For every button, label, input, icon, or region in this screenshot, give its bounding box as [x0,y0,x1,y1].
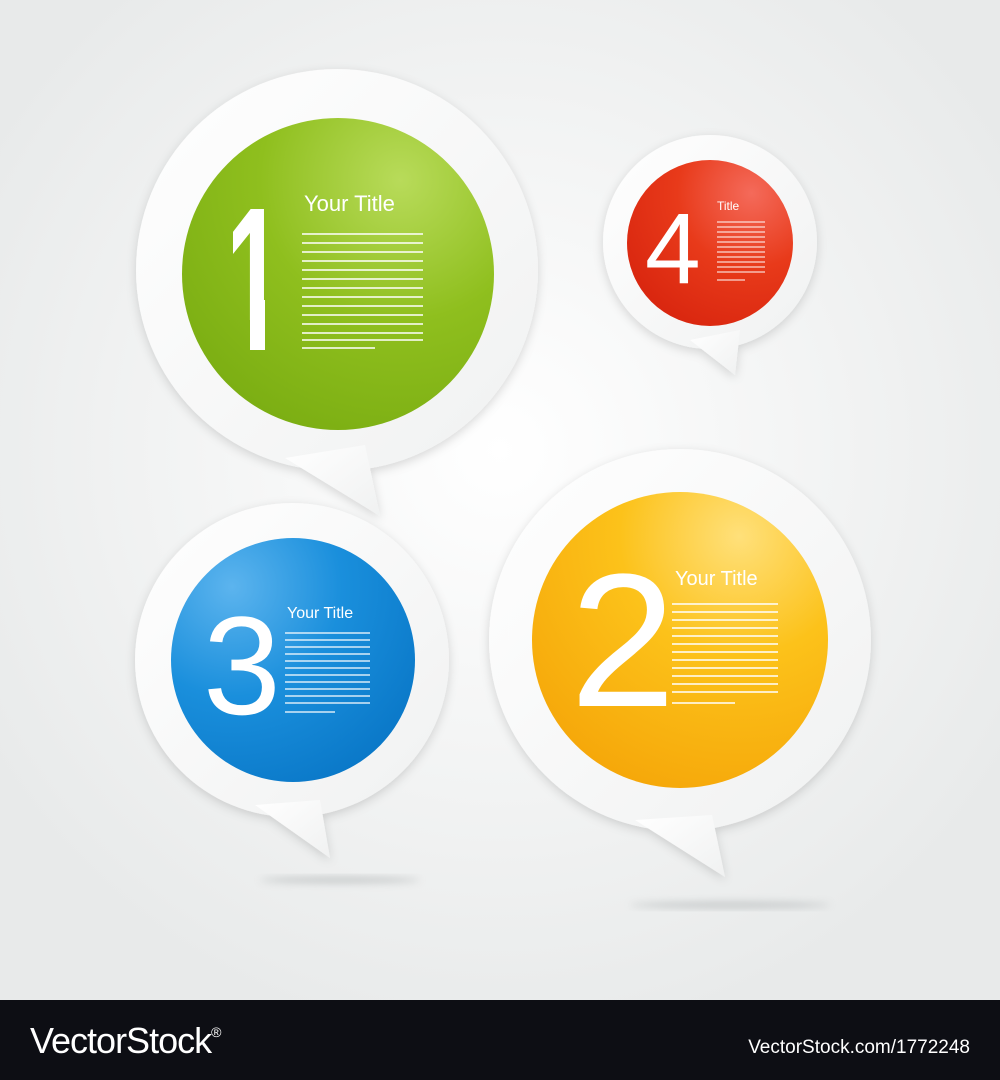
footer url: VectorStock.com/1772248 [748,1037,970,1058]
footer bar [0,1000,1000,1080]
bubble 3: blue [135,503,449,858]
number 3: 3 [203,587,281,744]
text lines 4 [717,222,765,280]
number 1: 1 [226,165,283,394]
number 4: 4 [645,193,701,305]
number 1 [233,209,265,350]
title 2: Your Title [675,568,758,590]
number 2: 2 [570,535,676,747]
text lines 2 [672,604,778,703]
bubble 1: green [136,69,538,516]
footer logo: VectorStock [30,1020,211,1061]
title 3: Your Title [287,605,353,622]
title 4: Title [717,199,740,213]
footer logo: ® [211,1024,222,1040]
bubble 4: red [603,135,817,375]
text lines 3 [285,633,370,712]
floor shadows [260,877,830,908]
bubble 2: yellow [489,449,871,877]
text lines 1 [302,234,423,348]
title 1: Your Title [304,191,395,216]
